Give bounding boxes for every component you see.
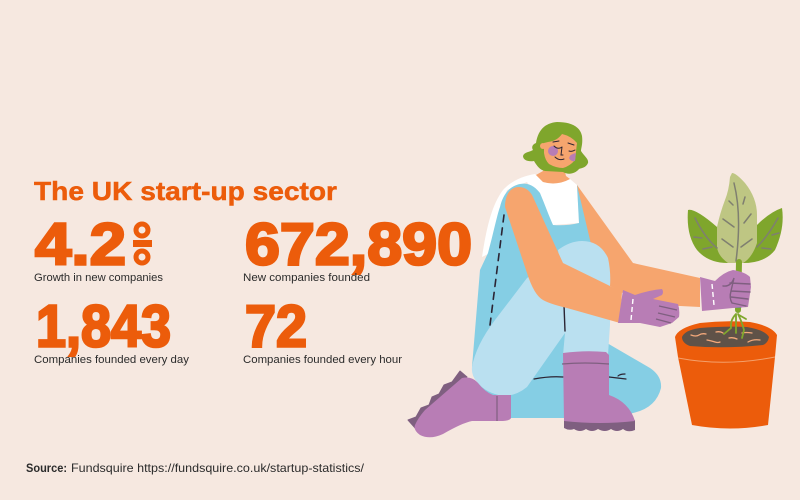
stat: growth in new companies: 4.2 — [35, 212, 126, 278]
stat: companies founded every hour: 72 — [245, 294, 307, 360]
stat: companies founded every hour: Companies founded every hour — [243, 354, 402, 366]
glove: right hand gripping stem — [700, 270, 751, 311]
back arm — [577, 185, 700, 307]
overall stitching and seams — [490, 215, 626, 379]
cheek right — [569, 153, 576, 161]
stat: growth in new companies: Growth in new companies — [34, 272, 164, 284]
glove: left hand — [618, 289, 679, 327]
soil — [682, 327, 769, 347]
stat: companies founded every hour — [243, 294, 402, 366]
hair — [523, 122, 588, 174]
blue overalls — [472, 184, 661, 418]
neck — [536, 160, 570, 183]
plant: stem and roots — [724, 262, 746, 338]
stat: growth in new companies — [34, 212, 164, 284]
illustration: gardener kneeling with plant — [408, 122, 783, 437]
source line: Source: — [26, 461, 67, 475]
plant: leaves — [688, 173, 783, 263]
stat: companies founded every day: 1,843 — [36, 294, 171, 360]
face details — [540, 141, 576, 161]
cheek left — [548, 146, 558, 156]
thigh — [472, 255, 565, 396]
bent knee and shin — [558, 241, 610, 355]
ear — [540, 143, 546, 149]
pot — [675, 321, 777, 428]
title: The UK start-up sector — [34, 176, 337, 206]
right boot — [562, 351, 635, 431]
stat: new companies founded: New companies founded — [243, 272, 370, 284]
icon: percent sign — [133, 224, 152, 263]
left boot — [408, 371, 511, 437]
white shirt — [482, 174, 579, 257]
front arm — [505, 187, 622, 323]
source line: Fundsquire https://fundsquire.co.uk/startup-statistics/ — [71, 461, 365, 475]
stat: companies founded every day: Companies founded every day — [34, 354, 190, 366]
stat: new companies founded: 672,890 — [245, 212, 472, 278]
face — [544, 134, 577, 168]
